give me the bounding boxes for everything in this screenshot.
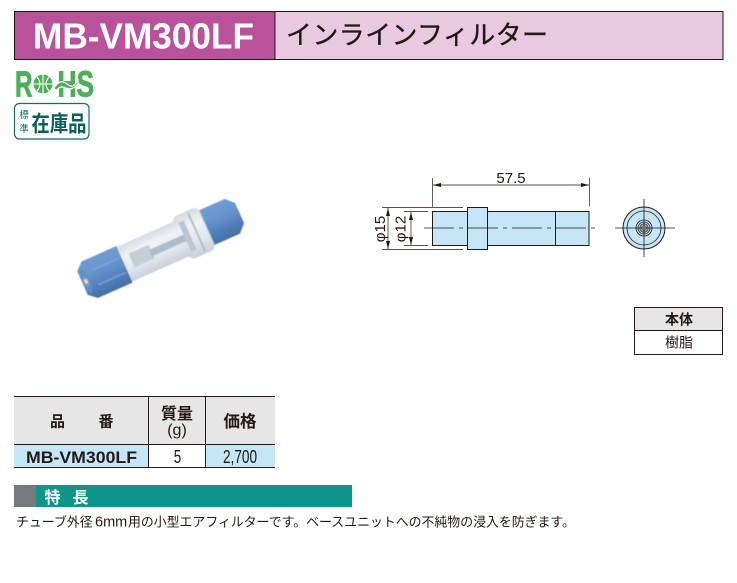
stock badge [14,104,89,139]
title banner [14,12,723,60]
stock badge: 在庫品 [32,112,86,136]
collar [172,207,216,260]
product table: 5 [174,447,181,467]
features heading bar [14,485,352,507]
product table: 2,700 [223,447,257,467]
dimension 57.5 [433,170,589,187]
features description: チューブ外径 [16,514,93,530]
model number heading: MB-VM300LF [33,16,254,56]
product name heading: インラインフィルター [286,20,548,50]
material table [634,308,722,354]
dimension drawing: side view [372,170,596,250]
dimension diameter 12: φ12 [392,216,410,242]
product table: 番 [98,414,114,430]
features description: 用の小型エアフィルターです。ベースユニットへの不純物の浸入を防ぎます。 [128,514,575,530]
product table [14,396,275,468]
dimension 57.5: 57.5 [496,170,526,187]
product table: (g) [167,422,187,439]
product table: 質量 [161,405,193,423]
dimension diameter 15: φ15 [372,216,389,242]
left blue cap [74,246,133,301]
right blue cap [193,196,247,247]
features heading bar: 特 [44,488,61,507]
stock badge: 準 [19,123,29,135]
dimension diameter 15 [372,208,390,249]
RoHS logo [15,64,94,104]
RoHS logo: HS [58,64,94,104]
product photo: inline filter [73,192,249,304]
material table: 樹脂 [665,334,693,350]
product table: 価格 [224,412,257,431]
RoHS logo: R [15,64,32,104]
material table: 本体 [665,312,693,328]
table row: MB-VM300LF [26,448,137,467]
features heading bar: 長 [72,489,89,507]
stock badge: 標 [19,109,29,121]
features description: 6mm [95,514,127,530]
transparent body [111,220,192,284]
dimension drawing: end view [615,199,675,257]
table header: 品 [50,414,65,430]
dimension diameter 12 [392,212,413,245]
